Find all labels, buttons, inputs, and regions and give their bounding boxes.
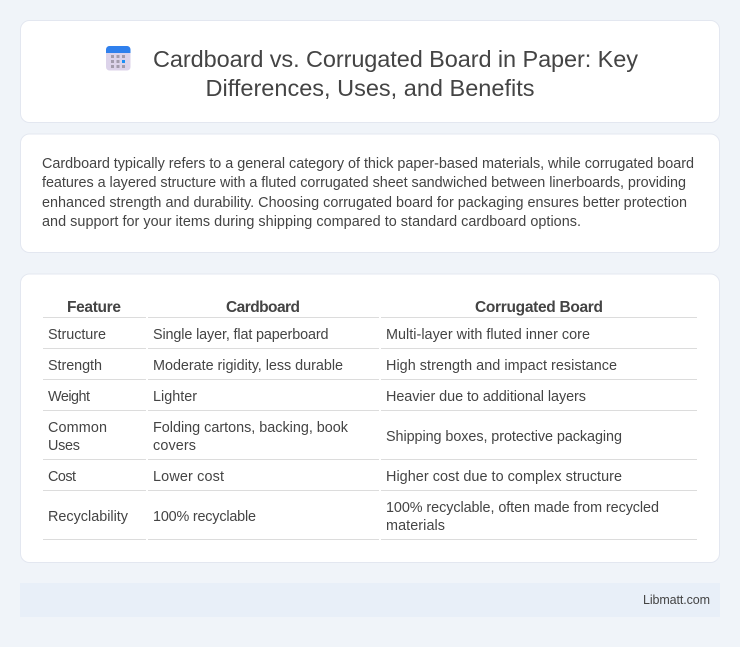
row: strength: High strength and impact resistance <box>386 358 617 374</box>
row: structure <box>48 327 590 343</box>
text block: introduction: Cardboard typically refers to a general category of thick paper-based materials, while corrugated board <box>42 156 694 172</box>
row: weight: Weight <box>48 389 90 405</box>
panel: title card <box>20 20 720 122</box>
row: structure: Single layer, flat paperboard <box>153 327 328 343</box>
row: structure: Multi-layer with fluted inner core <box>386 327 590 343</box>
row: cost: Higher cost due to complex structure <box>386 469 622 485</box>
text block: introduction: features a layered structure with a fluted corrugated sheet sandwiched between linerboards, providing <box>42 175 686 191</box>
row: strength <box>48 358 617 374</box>
table header row <box>67 299 603 316</box>
row: cost: Cost <box>48 469 76 485</box>
panel: comparison table <box>20 274 720 562</box>
text block: introduction: and support for your items during shipping compared to standard cardboard options. <box>42 214 581 230</box>
row: common uses <box>48 420 622 454</box>
row: weight: Heavier due to additional layers <box>386 389 586 405</box>
row: common uses: Uses <box>48 438 80 454</box>
row: common uses: Shipping boxes, protective packaging <box>386 429 622 445</box>
row: recyclability: Recyclability <box>48 509 129 525</box>
row: weight <box>48 389 586 405</box>
footer brand text: Libmatt.com <box>643 593 710 607</box>
table header row: Cardboard <box>226 299 300 316</box>
row: strength: Moderate rigidity, less durable <box>153 358 343 374</box>
row: common uses: Folding cartons, backing, book <box>153 420 349 436</box>
row: strength: Strength <box>48 358 102 374</box>
title <box>153 46 638 101</box>
footer <box>20 583 720 617</box>
row: recyclability <box>48 500 659 534</box>
title: Differences, Uses, and Benefits <box>206 75 534 101</box>
row: recyclability: materials <box>386 518 445 534</box>
icon: calendar <box>106 46 130 70</box>
panel: introduction <box>20 134 720 252</box>
table header row: Corrugated Board <box>475 299 603 316</box>
row: weight: Lighter <box>153 389 197 405</box>
title: Cardboard vs. Corrugated Board in Paper: Key <box>153 46 638 72</box>
row: recyclability: 100% recyclable, often made from recycled <box>386 500 659 516</box>
text block: introduction: enhanced strength and durability. Choosing corrugated board for packaging ensures better protection <box>42 195 687 211</box>
row: cost: Lower cost <box>153 469 224 485</box>
row: common uses: covers <box>153 438 196 454</box>
row: recyclability: 100% recyclable <box>153 509 256 525</box>
row: cost <box>48 469 622 485</box>
row: structure: Structure <box>48 327 106 343</box>
table header row: Feature <box>67 299 121 316</box>
row: common uses: Common <box>48 420 107 436</box>
text block: introduction <box>42 156 694 230</box>
